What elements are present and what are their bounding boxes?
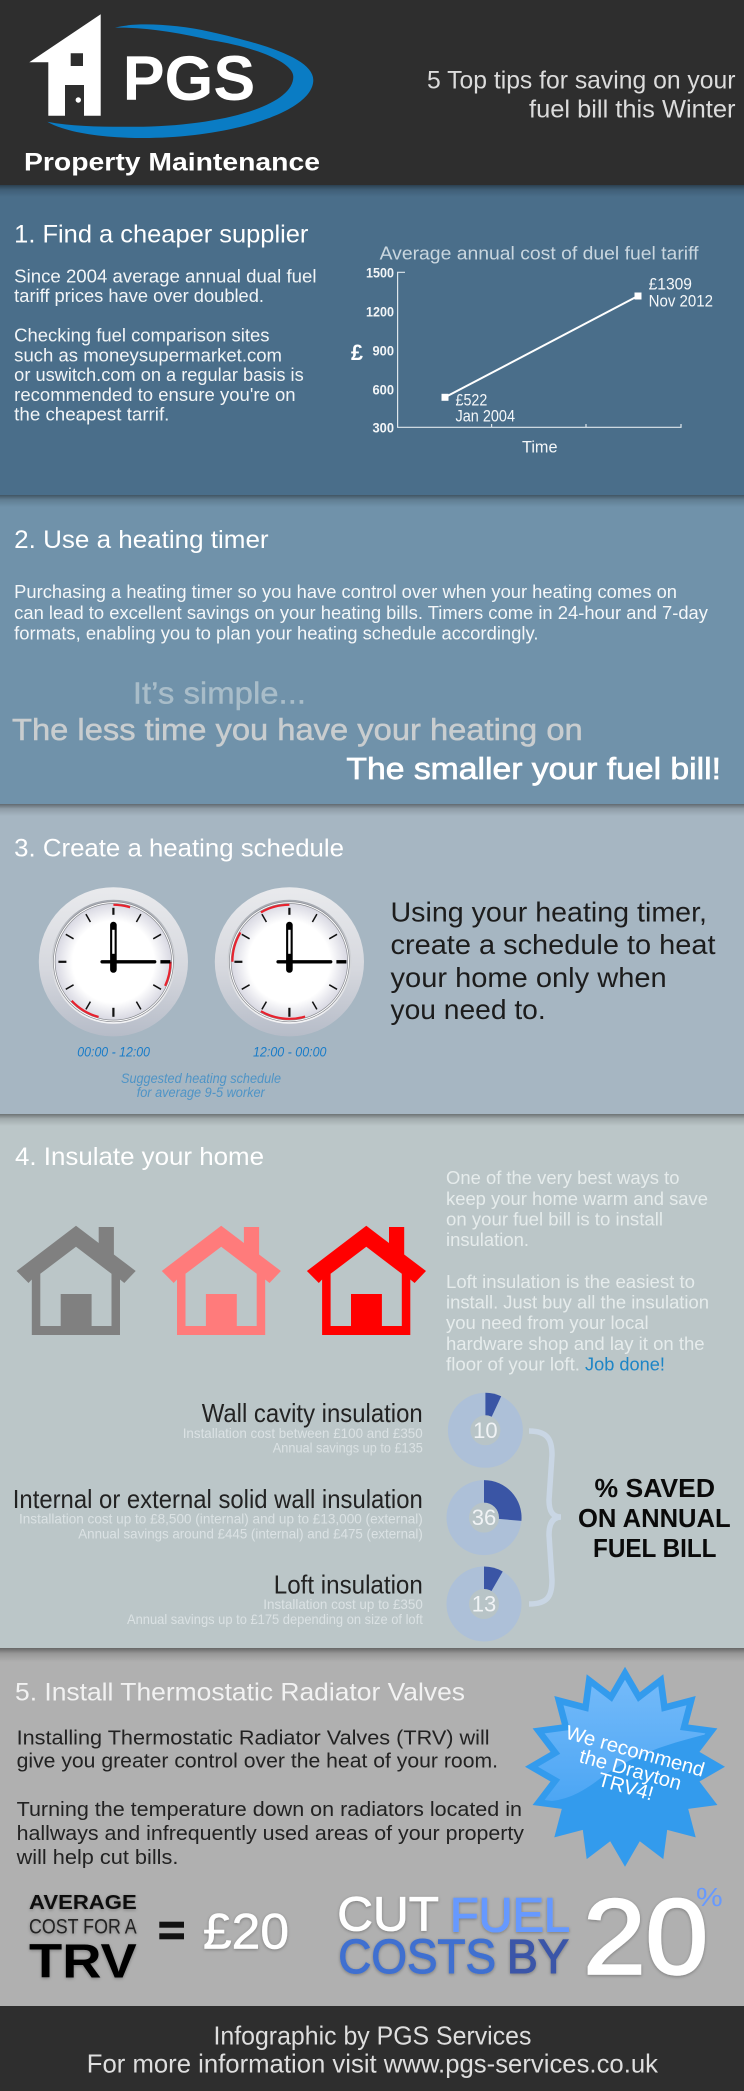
stat: average cost for a TRV: TRV	[29, 1936, 137, 1989]
callout: it's simple: The smaller your fuel bill!	[346, 751, 721, 786]
logo subtitle: Property Maintenance	[24, 148, 320, 176]
text block: solid wall insulation: Internal or external solid wall insulation	[13, 1484, 423, 1514]
header tagline	[427, 66, 736, 124]
text block: loft insulation: Annual savings up to £175 depending on size of loft	[127, 1611, 423, 1627]
text block: section 4 intro: install. Just buy all the insulation	[446, 1292, 709, 1312]
clock captions: for average 9-5 worker	[137, 1085, 265, 1100]
text block: section 2 body: can lead to excellent savings on your heating bills. Timers come in 24-hour and 7-day	[14, 603, 708, 623]
text block: solid wall insulation: Installation cost up to £8,500 (internal) and up to £13,000 (external)	[19, 1510, 423, 1526]
text block: section 4 intro: Loft insulation is the easiest to	[446, 1272, 695, 1292]
text block: solid wall insulation	[13, 1484, 423, 1542]
logo wordmark: PGS	[123, 44, 255, 114]
text block: section 5 body: give you greater control over the heat of your room.	[17, 1751, 498, 1773]
icon: grey house	[17, 1226, 136, 1335]
brace	[529, 1431, 561, 1604]
text block: section 4 intro: you need from your local	[446, 1313, 649, 1333]
donut chart: 10: 10	[473, 1418, 498, 1443]
icon: red house	[307, 1226, 426, 1335]
text block: wall cavity insulation	[183, 1398, 423, 1455]
callout: percent saved	[578, 1473, 731, 1563]
text block: section 4 intro: hardware shop and lay it on the	[446, 1334, 705, 1354]
clock captions: Suggested heating schedule	[121, 1071, 281, 1086]
text block: section 1 body: Checking fuel comparison sites	[14, 326, 270, 346]
text block: section 1 body: tariff prices have over doubled.	[14, 286, 264, 306]
heading: section 3: 3. Create a heating schedule	[14, 835, 344, 863]
stat: twenty pounds: £20	[203, 1903, 289, 1959]
badge: drayton recommendation: TRV4!	[595, 1769, 656, 1805]
text block: section 4 intro: Job done!	[585, 1354, 665, 1374]
footer text	[87, 2020, 659, 2078]
text block: section 3 body: create a schedule to heat	[390, 929, 716, 960]
icon: clock 12:00-00:00	[215, 887, 364, 1036]
donut chart: 13	[446, 1566, 522, 1642]
text block: section 1 body: recommended to ensure you're on	[14, 385, 296, 405]
icon: pink house	[162, 1226, 281, 1335]
heading: section 1: 1. Find a cheaper supplier	[14, 221, 308, 249]
text block: section 5 body: Turning the temperature down on radiators located in	[17, 1799, 522, 1821]
text block: section 5 body	[16, 1727, 524, 1869]
stat: cut fuel costs by 20%	[337, 1876, 723, 1996]
footer text: For more information visit www.pgs-services.co.uk	[87, 2048, 659, 2078]
stat: average cost for a TRV: COST FOR A	[29, 1915, 137, 1938]
y axis unit: £	[351, 340, 364, 365]
text block: section 5 body: will help cut bills.	[16, 1847, 178, 1869]
badge: drayton recommendation	[525, 1667, 725, 1867]
text block: section 4 intro: on your fuel bill is to install	[446, 1210, 663, 1230]
x axis label: Time	[522, 439, 558, 457]
stat: cut fuel costs by 20%: 20	[583, 1876, 708, 1996]
callout: it's simple: It’s simple...	[133, 676, 306, 711]
callout: it's simple	[12, 676, 721, 786]
y axis labels: 600	[372, 381, 394, 397]
text block: wall cavity insulation: Annual savings up to £135	[273, 1439, 423, 1455]
y axis labels	[366, 265, 394, 436]
equals sign	[159, 1922, 184, 1939]
text block: section 2 body	[14, 582, 708, 644]
text block: section 1 body	[14, 267, 316, 425]
text block: section 1 body: or uswitch.com on a regular basis is	[14, 365, 304, 385]
clock captions	[77, 1044, 327, 1100]
stat: cut fuel costs by 20%: COSTS	[338, 1931, 496, 1984]
stat: cut fuel costs by 20%: FUEL	[450, 1890, 570, 1942]
text block: section 4 intro	[446, 1168, 709, 1374]
text block: section 4 intro: floor of your loft.	[446, 1354, 580, 1374]
header tagline: 5 Top tips for saving on your	[427, 66, 736, 94]
y axis labels: 900	[372, 342, 394, 358]
data labels	[456, 275, 713, 425]
text block: section 4 intro: One of the very best ways to	[446, 1168, 680, 1188]
donut chart: 36: 36	[472, 1505, 496, 1530]
clock captions: 00:00 - 12:00	[77, 1044, 150, 1060]
y axis labels: 1200	[366, 304, 394, 320]
heading: section 4: 4. Insulate your home	[15, 1143, 264, 1171]
text block: loft insulation: Installation cost up to £350	[263, 1596, 423, 1612]
line chart: average annual cost	[351, 243, 713, 457]
text block: section 3 body: your home only when	[390, 962, 667, 993]
text block: loft insulation: Loft insulation	[274, 1570, 423, 1600]
text block: wall cavity insulation: Installation cost between £100 and £350	[183, 1425, 423, 1441]
donut chart: 36	[446, 1480, 522, 1555]
badge: drayton recommendation: We recommend	[563, 1722, 707, 1782]
stat: cut fuel costs by 20%: CUT	[337, 1888, 439, 1942]
text block: section 1 body: the cheapest tarrif.	[14, 405, 169, 425]
clock captions: 12:00 - 00:00	[253, 1044, 327, 1060]
stat: average cost for a TRV: AVERAGE	[29, 1892, 137, 1914]
data labels: Jan 2004	[456, 407, 515, 425]
text block: section 5 body: hallways and infrequently used areas of your property	[17, 1823, 524, 1845]
donut chart: 13: 13	[472, 1592, 496, 1616]
text block: section 2 body: Purchasing a heating timer so you have control over when your heating comes on	[14, 582, 677, 602]
text block: section 1 body: such as moneysupermarket.com	[14, 346, 282, 366]
icon: house	[29, 14, 101, 116]
callout: it's simple: The less time you have your heating on	[12, 712, 583, 747]
header: logo	[24, 14, 320, 176]
text block: solid wall insulation: Annual savings around £445 (internal) and £475 (external)	[78, 1526, 423, 1542]
chart axes	[398, 272, 681, 427]
data line	[442, 292, 642, 401]
data labels: £1309	[649, 275, 692, 293]
text block: section 5 body: Installing Thermostatic Radiator Valves (TRV) will	[17, 1727, 490, 1749]
text block: section 2 body: formats, enabling you to plan your heating schedule accordingly.	[14, 624, 538, 644]
stat: cut fuel costs by 20%: %	[696, 1882, 723, 1912]
header tagline: fuel bill this Winter	[529, 96, 736, 124]
text block: wall cavity insulation: Wall cavity insulation	[202, 1398, 423, 1428]
y axis labels: 300	[372, 420, 394, 436]
callout: percent saved: FUEL BILL	[593, 1533, 717, 1563]
data labels: £522	[456, 392, 487, 410]
chart title: Average annual cost of duel fuel tariff	[380, 243, 700, 263]
text block: section 3 body: Using your heating timer,	[390, 896, 707, 928]
heading: section 2: 2. Use a heating timer	[14, 526, 269, 554]
text block: section 1 body: Since 2004 average annual dual fuel	[14, 267, 316, 287]
stat: average cost for a TRV	[29, 1892, 137, 1989]
heading: section 5: 5. Install Thermostatic Radiator Valves	[15, 1679, 465, 1707]
y axis labels: 1500	[366, 265, 394, 281]
callout: percent saved: ON ANNUAL	[578, 1503, 731, 1533]
footer text: Infographic by PGS Services	[214, 2020, 531, 2050]
callout: percent saved: % SAVED	[594, 1473, 715, 1503]
stat: cut fuel costs by 20%: BY	[507, 1931, 569, 1984]
donut chart: 10	[448, 1393, 523, 1468]
text block: loft insulation	[127, 1570, 423, 1627]
data labels: Nov 2012	[649, 293, 713, 311]
icon: clock 00:00-12:00	[39, 887, 188, 1036]
text block: section 4 intro: insulation.	[446, 1230, 529, 1250]
text block: section 4 intro: keep your home warm and save	[446, 1189, 708, 1209]
icon: blue swoosh	[47, 24, 313, 138]
text block: section 3 body	[390, 896, 716, 1025]
text block: section 3 body: you need to.	[390, 994, 546, 1025]
badge: drayton recommendation: the Drayton	[577, 1746, 684, 1795]
